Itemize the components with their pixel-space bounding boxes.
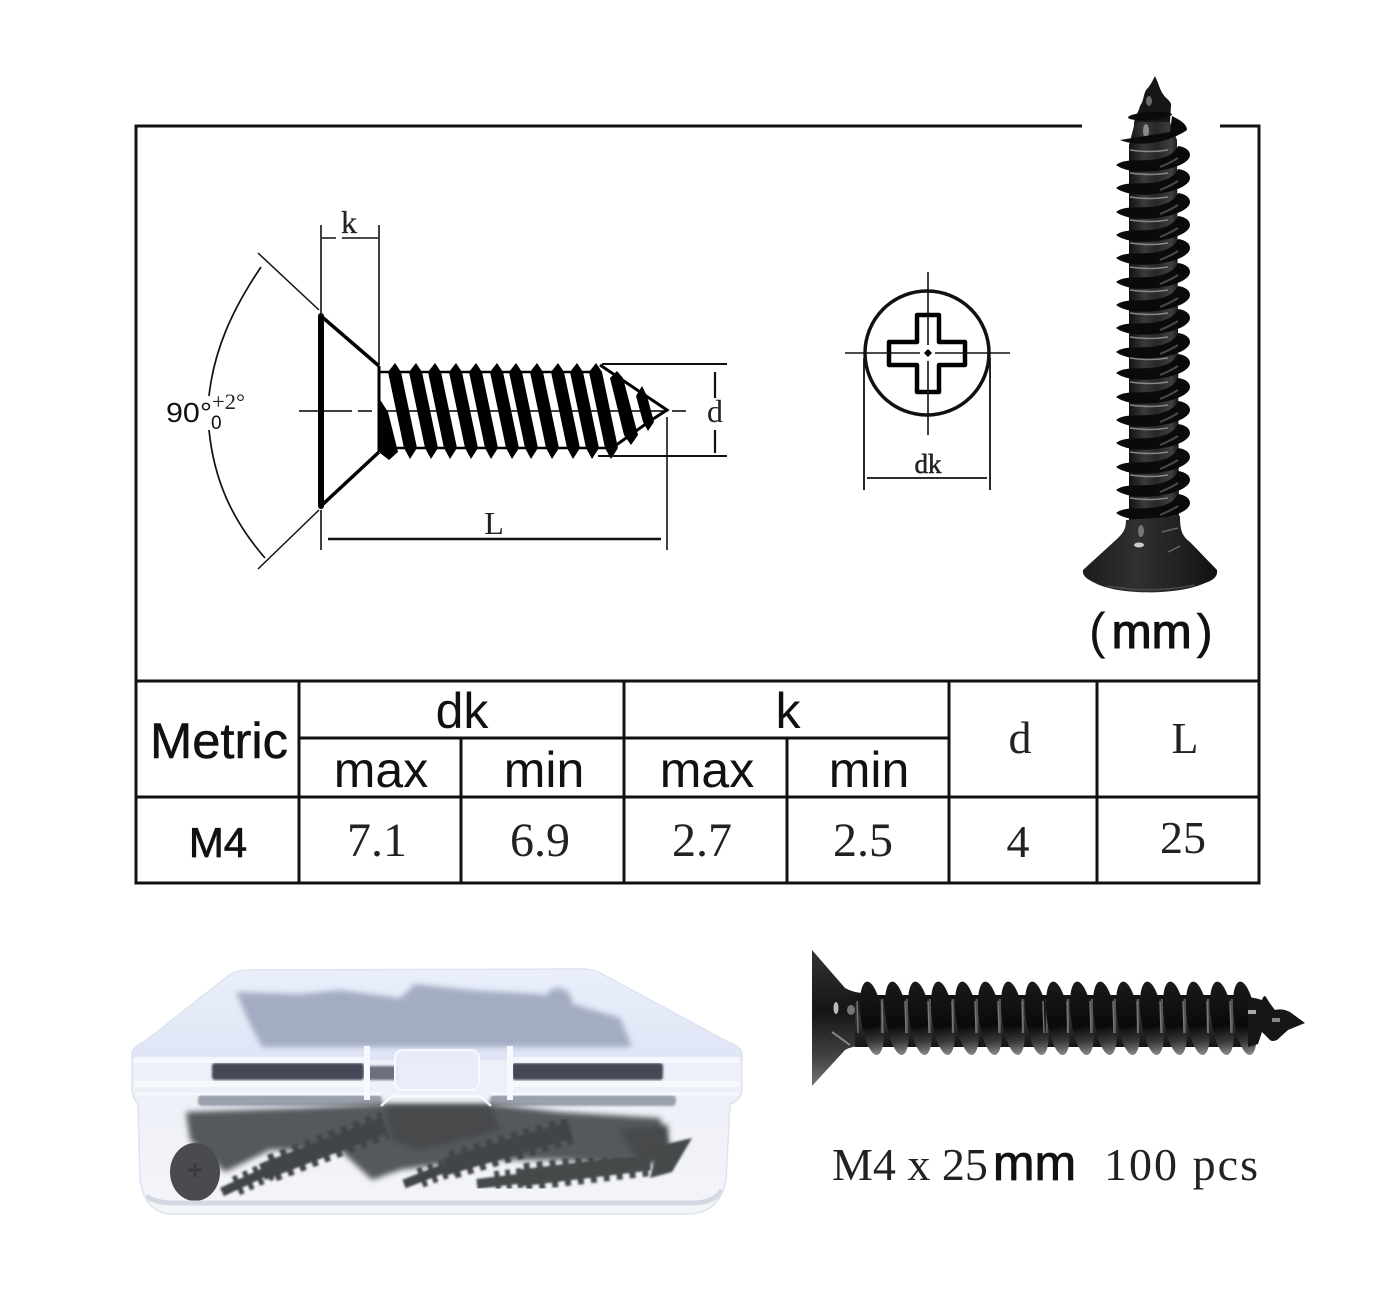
table values: 4 [1006,816,1030,867]
angle dimension 90 degrees: 0 [211,413,222,434]
front screw 1 [222,1125,385,1192]
blurred back screws seen through lid [236,984,632,1047]
dimension d [598,364,727,456]
table values: 2.5 [833,814,893,867]
dimension k: k [341,204,357,240]
unit label: (mm) [1089,603,1213,659]
lighter band behind lid edge [198,1095,676,1106]
caption: size and quantity [832,1135,1258,1191]
diagram: top view of Phillips head [845,272,1010,490]
screw tip [1134,76,1171,126]
screw head disc [170,1143,220,1201]
tapered tip [600,365,667,448]
table grid [136,681,1259,883]
dimension L [321,417,667,550]
table headers: Metric [150,713,288,769]
table values [189,812,1206,867]
photo: clear plastic box with screws [132,969,742,1214]
caption: size and quantity: M4 x 25mm [832,1135,1076,1191]
diagram: top view of Phillips head: dk [914,449,942,479]
thread bands [379,363,654,460]
box outline [132,969,742,1214]
lid and latch highlights [134,1046,740,1203]
specification table [136,681,1259,883]
front screw 3 [477,1162,650,1184]
box lid top [132,969,742,1060]
table headers: min [504,742,584,798]
threads [1116,110,1190,520]
dimension k [321,204,379,365]
front screw 2 [404,1130,570,1184]
photo: horizontal black screw [812,950,1305,1086]
table headers [150,683,1198,798]
table headers: min [829,742,909,798]
table headers: d [1008,712,1032,763]
table values: 2.7 [672,814,732,867]
tapered tip [1248,996,1305,1047]
table headers: max [334,742,428,798]
centre line [299,410,686,412]
shaft [1129,122,1179,526]
angle dimension 90 degrees: 90° [166,397,212,428]
table headers: max [660,742,754,798]
panel: drawing frame and specification table outline [136,126,1259,883]
table values: 7.1 [347,814,407,867]
caption: size and quantity: 100 pcs [1104,1139,1258,1190]
photo: vertical black screw [1083,76,1217,592]
countersunk head [1083,516,1217,592]
angle dimension 90 degrees: +2° [212,389,245,414]
dimension d: d [707,393,723,429]
table values: 25 [1160,812,1206,863]
head highlights [834,1002,838,1014]
table headers: dk [436,683,489,739]
diagram: side view of countersunk screw [166,204,727,569]
table values: M4 [189,819,247,866]
screw 3 head [650,1138,692,1178]
table headers: k [776,683,802,739]
table values: 6.9 [510,814,570,867]
table headers: L [1172,714,1198,763]
blurred lower screw mass [186,1104,672,1180]
box silhouette [132,969,742,1214]
head outline [321,316,610,506]
angle dimension 90 degrees [166,253,319,569]
dimension L: L [484,505,504,541]
shaft [855,995,1250,1047]
upper dark band of screws [212,1063,663,1080]
screw head [812,950,862,1086]
threads [856,980,1261,1056]
